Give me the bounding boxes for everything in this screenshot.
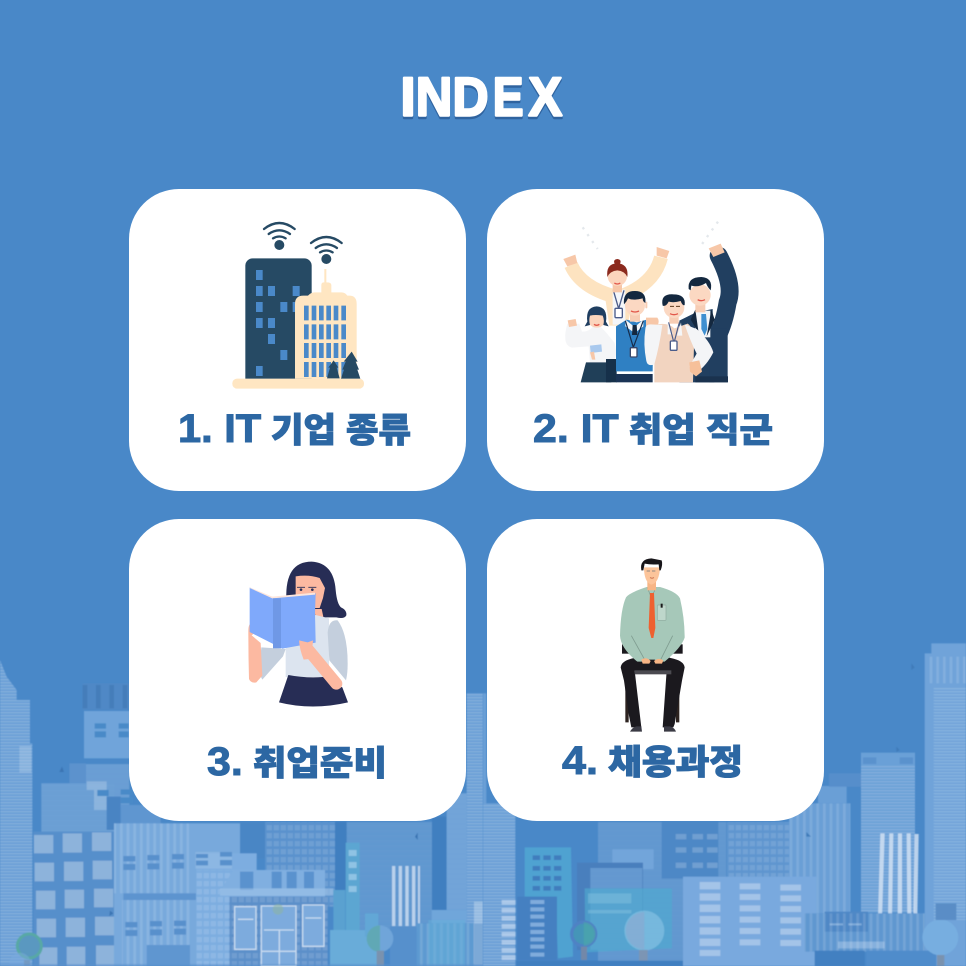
icon: man sitting on a chair [620, 558, 685, 732]
icon: cheering office workers [563, 222, 730, 382]
panel: 2. IT job roles [487, 189, 824, 491]
title shadow: X [528, 68, 562, 130]
title shadow: D [452, 68, 488, 130]
title letters: D [452, 66, 488, 128]
city skyline: right [483, 643, 966, 966]
card background 4 [487, 519, 824, 821]
title shadow [400, 68, 562, 130]
icon: woman reading a book [248, 562, 348, 706]
title: INDEX [400, 66, 562, 130]
label: 1. IT 기업 종류: 1. IT 기업 종류 [178, 403, 411, 452]
title letters: N [416, 66, 452, 128]
title letters: X [528, 66, 562, 128]
title shadow: I [400, 68, 416, 130]
panel: 1. IT company types [129, 189, 466, 491]
city skyline: left [0, 660, 483, 966]
card background 1 [129, 189, 466, 491]
title letters: I [400, 66, 416, 128]
card background 3 [129, 519, 466, 821]
title shadow: E [493, 68, 524, 130]
label: 4. 채용과정: 4. 채용과정 [562, 735, 743, 784]
panel: 3. job preparation [129, 519, 466, 821]
label: 2. IT 취업 직군: 2. IT 취업 직군 [533, 403, 773, 452]
title letters: E [493, 66, 524, 128]
card background 2 [487, 189, 824, 491]
title letters [400, 66, 562, 128]
panel: 4. hiring process [487, 519, 824, 821]
label: 3. 취업준비: 3. 취업준비 [207, 736, 387, 785]
title shadow: N [416, 68, 452, 130]
icon: office buildings with wifi [232, 223, 364, 389]
